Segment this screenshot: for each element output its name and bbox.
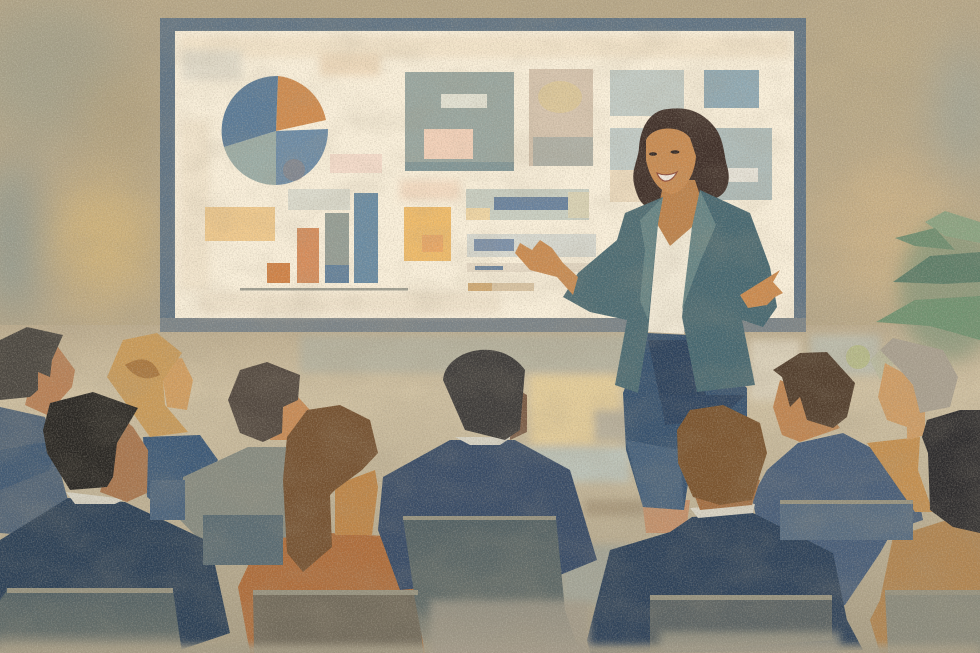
jacket right side: [682, 190, 777, 392]
smile: [657, 172, 677, 181]
neck and chest: [656, 180, 703, 246]
audience: [0, 327, 980, 653]
jacket lapels: [640, 190, 716, 320]
bar chart: [240, 193, 408, 290]
left hand: [740, 270, 783, 308]
text lines panel: [466, 189, 596, 291]
chairs: [0, 480, 980, 653]
dashboard card: tan panel: [529, 69, 593, 166]
back row: left man: [0, 327, 75, 535]
orange note blocks: [205, 154, 451, 261]
back row: right man: [752, 352, 923, 610]
chair: centre man: [403, 518, 580, 653]
legs: [642, 500, 690, 533]
back row: gray haired woman: [867, 338, 958, 512]
woman with ponytail: [238, 405, 447, 653]
pie chart: [222, 76, 328, 185]
back row: man centre left: [180, 362, 310, 547]
chair top rails: [7, 500, 980, 600]
chair: far right: [885, 592, 980, 653]
chair: back row left: [150, 480, 185, 520]
front left man: [0, 392, 230, 653]
lower wall: [0, 325, 980, 653]
dashboard card: gray panel: [405, 72, 514, 171]
chair: front left: [0, 590, 182, 653]
skirt: [623, 333, 747, 510]
bottom floor wash: [0, 600, 980, 653]
hair: [633, 108, 729, 208]
centre man: [378, 350, 597, 590]
dashboard cards: right side: [610, 70, 772, 202]
eyes: [649, 150, 680, 156]
screen frame: [160, 18, 806, 332]
jacket left side: [563, 197, 663, 393]
chair: back row centre: [203, 515, 283, 565]
face: [646, 128, 696, 194]
far right woman: [870, 410, 980, 653]
white blouse: [648, 218, 696, 334]
chair: front right: [650, 597, 832, 653]
chair: back row right: [780, 502, 913, 540]
right hand: [515, 240, 578, 295]
back row: blonde woman: [107, 333, 218, 520]
presentation screen: [160, 18, 806, 332]
plant: [846, 211, 980, 380]
presenter: [515, 108, 783, 533]
screen surface: [175, 31, 794, 318]
chair: ponytail woman: [253, 592, 423, 653]
front right man: [587, 405, 863, 653]
